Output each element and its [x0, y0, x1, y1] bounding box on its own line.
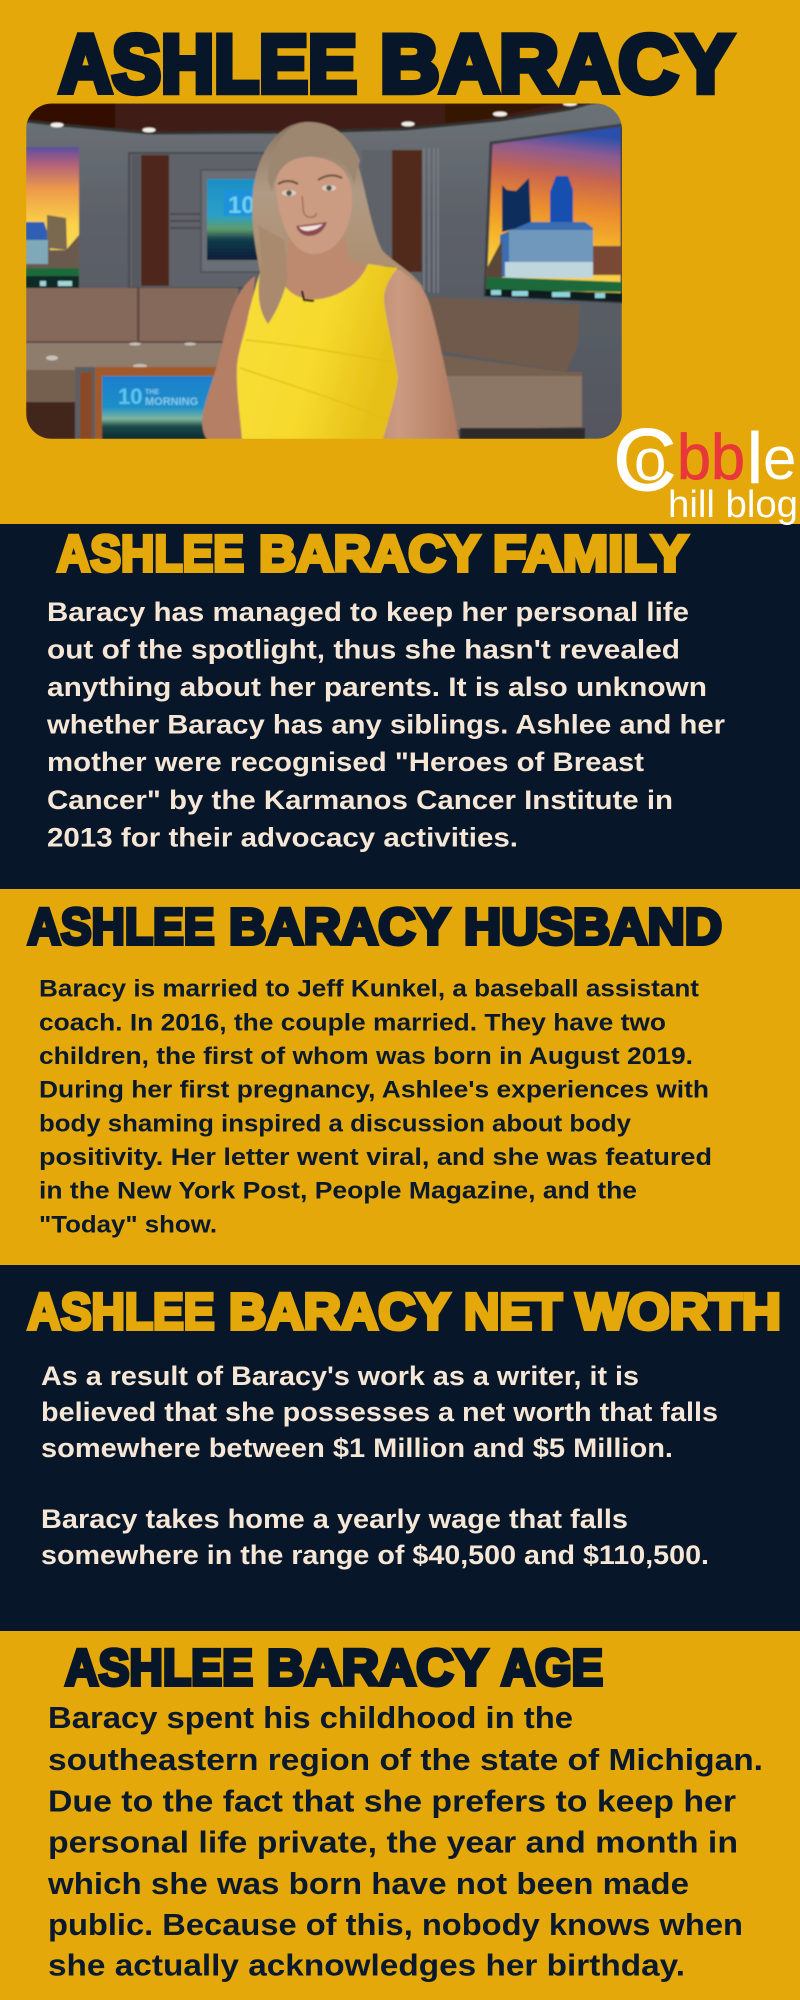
panel: header — [26, 32, 738, 439]
heading: net worth: ASHLEE — [28, 1283, 214, 1340]
text block: husband: in the New York Post, People Magazine, and the — [39, 1178, 637, 1205]
woman — [202, 122, 459, 439]
heading: family: BARACY — [259, 525, 480, 582]
heading: net worth: NET — [464, 1283, 562, 1340]
text block: age — [47, 1701, 763, 1982]
heading: husband — [28, 898, 722, 955]
heading: age: BARACY — [267, 1639, 488, 1696]
text block: family: 2013 for their advocacy activities. — [47, 822, 518, 852]
text block: age: which she was born have not been made — [47, 1867, 689, 1901]
text block: age: personal life private, the year and month in — [48, 1826, 738, 1860]
text block: family — [46, 597, 726, 852]
heading: family — [57, 525, 688, 582]
desk with monitor: 10 — [118, 384, 142, 409]
text block: husband: Baracy is married to Jeff Kunkel, a baseball assistant — [39, 976, 699, 1003]
text block: net worth — [41, 1361, 718, 1570]
eyes and brows — [278, 175, 342, 196]
studio wall — [26, 103, 622, 439]
text block: net worth: Baracy takes home a yearly wage that falls — [41, 1504, 628, 1534]
text block: net worth: As a result of Baracy's work as a writer, it is — [41, 1361, 639, 1391]
heading: age — [65, 1639, 603, 1696]
panel: family — [0, 524, 800, 889]
hair front — [268, 122, 360, 192]
panel: husband — [0, 889, 800, 1265]
logo: Cobble hill blog: hill blog — [668, 484, 798, 526]
text block: family: whether Baracy has any siblings. Ashlee and her — [46, 710, 726, 740]
text block: net worth: believed that she possesses a net worth that falls — [41, 1397, 718, 1427]
title — [59, 19, 733, 110]
right screen — [485, 125, 622, 302]
heading: age: AGE — [501, 1639, 603, 1696]
panel: age — [0, 1631, 800, 2000]
title: BARACY — [380, 19, 733, 110]
text block: family: out of the spotlight, thus she hasn't revealed — [47, 634, 680, 664]
center screen — [201, 170, 267, 272]
text block: age: public. Because of this, nobody knows when — [48, 1908, 743, 1942]
right sofa — [428, 297, 586, 439]
desk with monitor: THE — [145, 389, 159, 396]
text block: age: she actually acknowledges her birthday. — [48, 1948, 685, 1982]
photo: news anchor in studio — [26, 102, 622, 439]
text block: family: Cancer" by the Karmanos Cancer Institute in — [47, 785, 673, 815]
center screen: 10 — [228, 192, 255, 219]
neck and chest — [286, 238, 366, 300]
heading: husband: ASHLEE — [28, 898, 214, 955]
title: ASHLEE — [59, 19, 357, 110]
ceiling lights — [50, 102, 577, 132]
left sofa — [26, 288, 238, 439]
microphone — [302, 291, 314, 301]
text block: husband — [39, 976, 712, 1238]
hair lock — [258, 225, 288, 324]
text block: age: Baracy spent his childhood in the — [48, 1701, 573, 1735]
left screen — [26, 147, 79, 288]
hair back — [251, 121, 424, 288]
heading: husband: BARACY — [229, 898, 450, 955]
text block: family: mother were recognised "Heroes of Breast — [47, 747, 644, 777]
right door and stripes — [391, 148, 440, 294]
text block: net worth: somewhere between $1 Million and $5 Million. — [41, 1433, 673, 1463]
heading: net worth — [28, 1283, 781, 1340]
right arm — [382, 268, 460, 439]
face — [276, 157, 352, 254]
logo: Cobble hill blog: o — [634, 428, 666, 493]
heading: net worth: BARACY — [229, 1283, 450, 1340]
logo: Cobble hill blog: C — [613, 410, 677, 509]
mouth — [296, 222, 327, 236]
heading: family: FAMILY — [493, 525, 688, 582]
logo: Cobble hill blog: bb — [677, 421, 745, 493]
text block: husband: children, the first of whom was born in August 2019. — [39, 1043, 693, 1070]
left arm — [202, 276, 255, 439]
dress — [237, 264, 398, 439]
ceiling — [114, 104, 598, 132]
logo: Cobble hill blog: e — [763, 425, 796, 492]
text block: age: southeastern region of the state of Michigan. — [48, 1743, 763, 1777]
text block: age: Due to the fact that she prefers to keep her — [48, 1784, 736, 1818]
text block: husband: During her first pregnancy, Ashlee's experiences with — [39, 1077, 709, 1104]
nose — [302, 196, 316, 217]
text block: husband: body shaming inspired a discussion about body — [39, 1110, 632, 1138]
text block: net worth: somewhere in the range of $40,500 and $110,500. — [41, 1540, 709, 1570]
text block: family: anything about her parents. It is also unknown — [47, 672, 707, 702]
desk with monitor — [75, 367, 230, 439]
logo: Cobble hill blog — [613, 410, 798, 526]
center panels and door — [129, 153, 264, 288]
text block: husband: coach. In 2016, the couple married. They have two — [39, 1010, 666, 1036]
text block: husband: "Today" show. — [39, 1212, 217, 1238]
heading: husband: HUSBAND — [464, 898, 722, 955]
heading: net worth: WORTH — [576, 1283, 781, 1340]
text block: family: Baracy has managed to keep her personal life — [47, 597, 689, 627]
desk with monitor: MORNING — [145, 396, 198, 408]
logo: Cobble hill blog: l — [747, 420, 763, 499]
text block: husband: positivity. Her letter went viral, and she was featured — [39, 1144, 712, 1171]
panel: net worth — [0, 1265, 800, 1631]
heading: family: ASHLEE — [57, 525, 244, 582]
heading: age: ASHLEE — [65, 1639, 253, 1696]
